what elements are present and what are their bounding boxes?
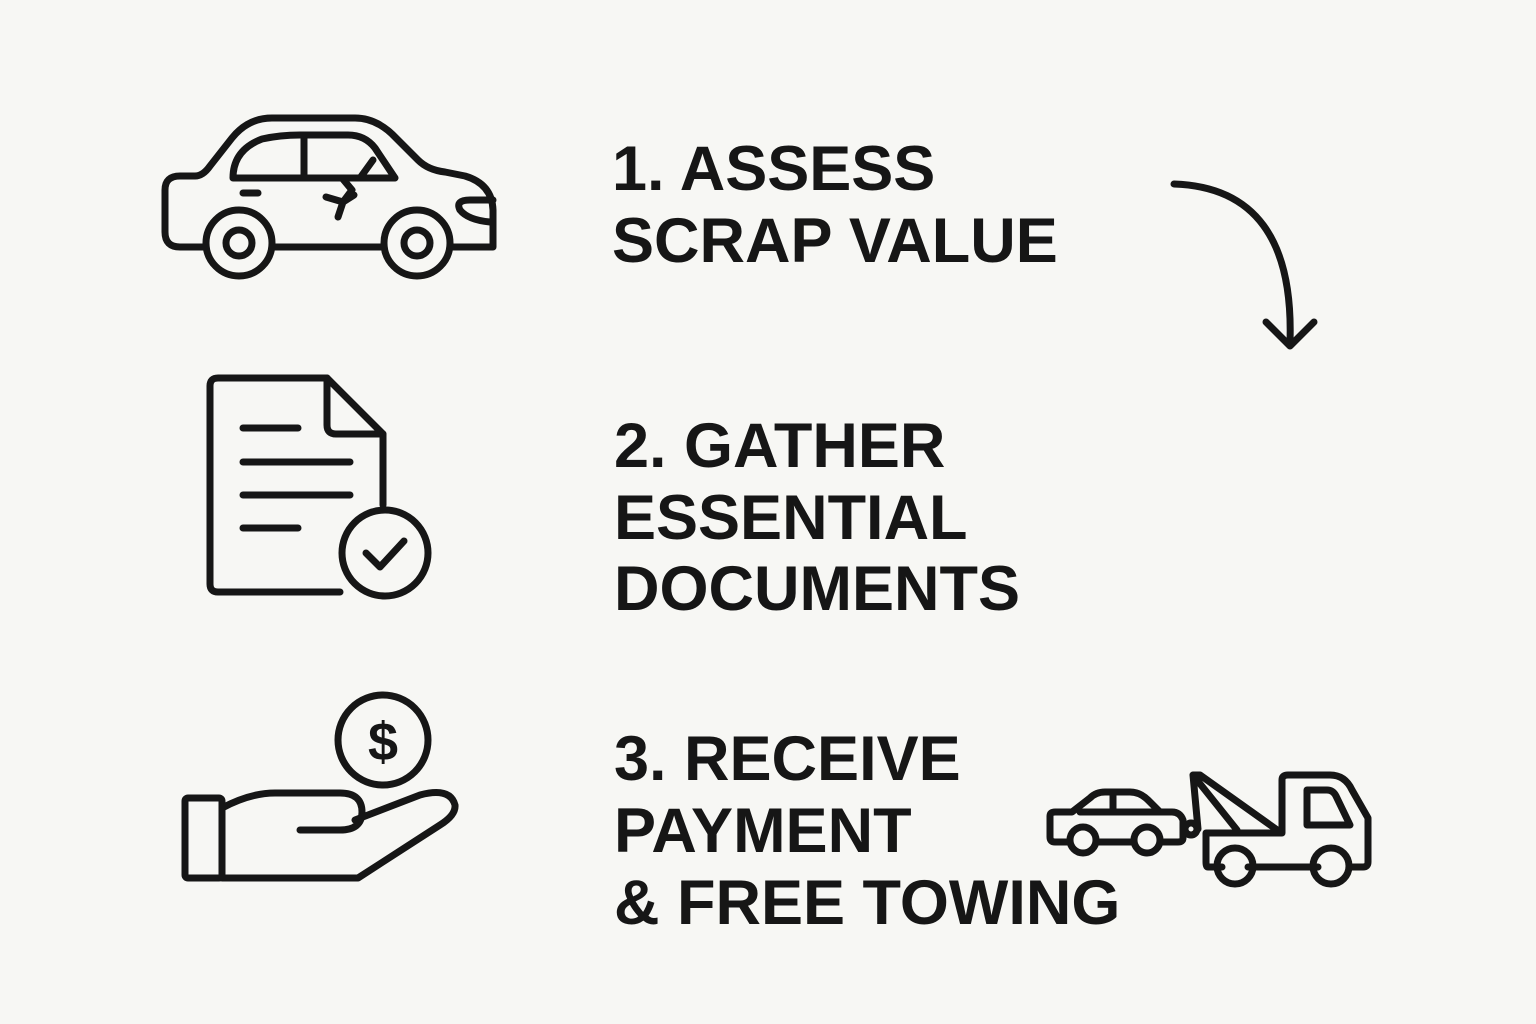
icon: damaged car [165, 118, 493, 276]
icon: tow truck with car [1050, 775, 1368, 884]
arrow: curved down [1174, 184, 1314, 346]
icon: hand with coin: $ [368, 712, 398, 772]
icon: document with check [210, 378, 428, 596]
heading: step 3: & FREE TOWING [614, 868, 1120, 938]
icon: hand with coin [185, 695, 455, 878]
heading: step 1 [612, 134, 1058, 276]
heading: step 3 [614, 724, 1120, 938]
heading: step 2: 2. GATHER [614, 411, 945, 481]
heading: step 3: 3. RECEIVE [614, 724, 961, 794]
heading: step 1: 1. ASSESS [612, 134, 935, 204]
heading: step 2 [614, 411, 1020, 624]
heading: step 1: SCRAP VALUE [612, 206, 1058, 276]
heading: step 3: PAYMENT [614, 796, 912, 866]
heading: step 2: ESSENTIAL [614, 483, 968, 553]
heading: step 2: DOCUMENTS [614, 554, 1020, 624]
